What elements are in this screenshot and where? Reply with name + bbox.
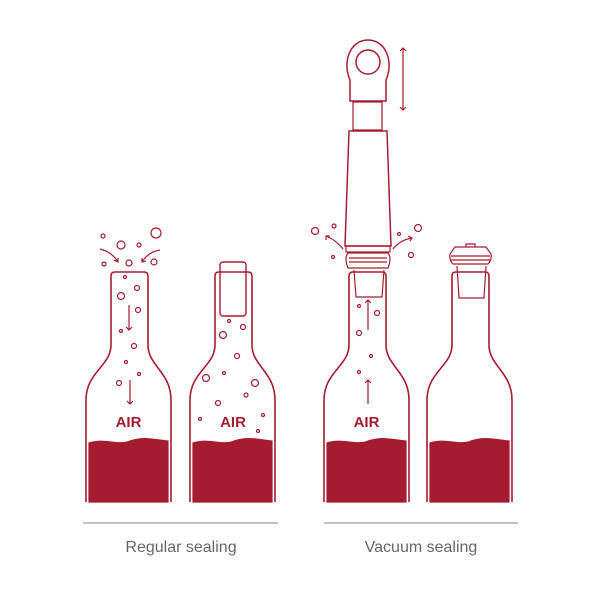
caption: Regular sealing: Regular sealing xyxy=(125,539,237,556)
caption: Vacuum sealing: Vacuum sealing xyxy=(365,539,477,556)
bottle 3: vacuum pump xyxy=(312,40,422,502)
label: AIR 3: AIR xyxy=(354,414,380,431)
label: AIR 2: AIR xyxy=(220,414,246,431)
divider: vacuum xyxy=(324,522,518,524)
bottle 2: regular corked xyxy=(190,262,275,502)
divider: regular xyxy=(83,522,278,524)
bottle 1: regular open xyxy=(86,228,171,502)
label: AIR 1: AIR xyxy=(116,414,142,431)
bottle 4: vacuum sealed xyxy=(427,244,512,502)
